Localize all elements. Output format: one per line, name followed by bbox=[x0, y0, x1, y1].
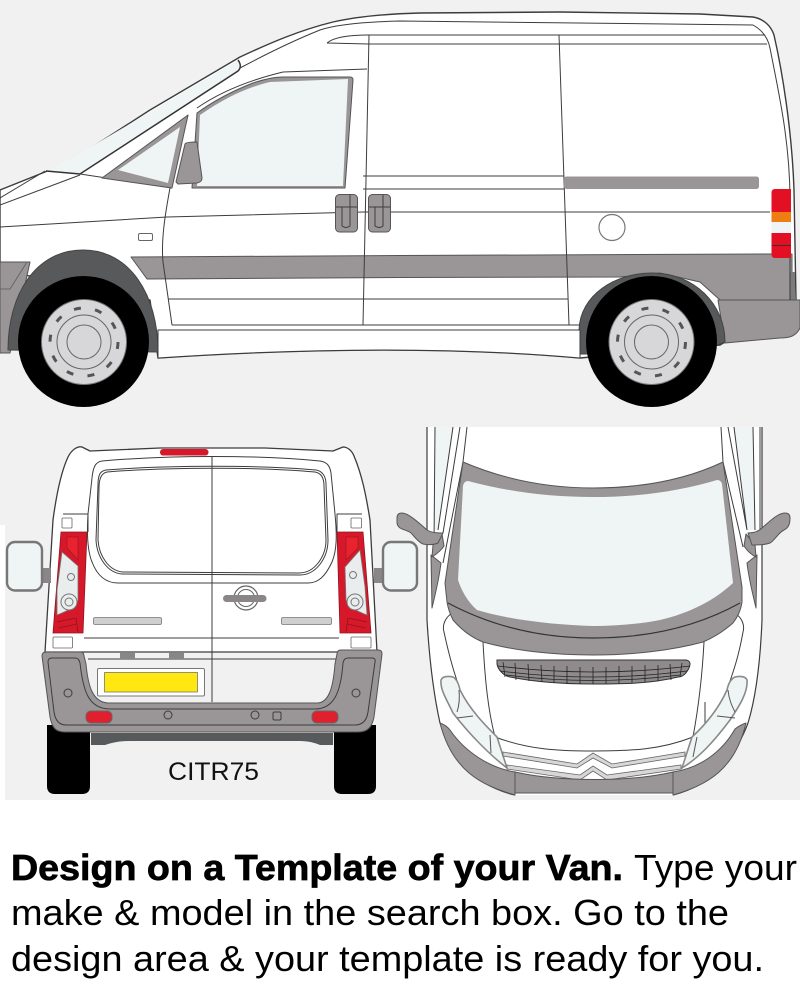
front wheel bbox=[18, 276, 149, 407]
right headlight bbox=[682, 676, 747, 768]
door handle left bbox=[336, 194, 358, 232]
left top mirror bbox=[397, 513, 443, 545]
caption line 1: Design on a Template of your Van. bbox=[11, 847, 623, 888]
model code: CITR75 bbox=[168, 758, 259, 786]
side tail light bbox=[772, 189, 791, 258]
right pillar glass bbox=[734, 427, 755, 530]
door handle bbox=[223, 586, 266, 610]
rear wheel right bbox=[334, 725, 376, 794]
side view of van bbox=[0, 12, 800, 407]
bumper bbox=[42, 650, 382, 732]
hinge right bbox=[169, 653, 184, 659]
van body side bbox=[0, 12, 796, 358]
front bumper centre bbox=[515, 772, 673, 793]
right pillar base bbox=[744, 534, 756, 557]
windscreen side bbox=[45, 60, 240, 174]
bonnet grille bbox=[497, 660, 690, 684]
right tail light bbox=[337, 532, 371, 633]
underbody bbox=[91, 733, 333, 745]
rear bumper bbox=[718, 300, 800, 343]
rear body bbox=[45, 447, 377, 652]
rear mirror arm left bbox=[41, 568, 51, 583]
chevron logo bands bbox=[503, 752, 685, 780]
caption line 1: Type your bbox=[634, 847, 797, 888]
front wheel arch bbox=[8, 250, 158, 352]
caption line 3: design area & your template is ready for you. bbox=[11, 938, 764, 979]
rear mirror right bbox=[383, 542, 417, 590]
brake light bbox=[160, 449, 208, 456]
body panel lines bbox=[0, 21, 790, 325]
fuel cap bbox=[599, 214, 625, 240]
rear wheel bbox=[586, 276, 717, 407]
left tail light bbox=[53, 532, 87, 633]
trim strip left bbox=[94, 618, 162, 624]
reflector right bbox=[312, 711, 338, 723]
front side door window bbox=[192, 77, 353, 188]
right side strip bbox=[747, 555, 757, 608]
right lower front corner bbox=[673, 723, 746, 795]
rear mirror left bbox=[7, 542, 42, 590]
left pillar base bbox=[432, 534, 444, 557]
windscreen glass bbox=[458, 480, 733, 626]
side mirror bbox=[176, 142, 202, 184]
rear mirror arm right bbox=[374, 568, 384, 583]
upper rear stripe bbox=[564, 176, 759, 189]
front bumper side bbox=[0, 262, 30, 353]
sill bbox=[158, 330, 580, 358]
quarter window bbox=[102, 115, 188, 188]
trim strip right bbox=[282, 618, 332, 624]
caption line 2: make & model in the search box. Go to the bbox=[11, 892, 729, 933]
grey lower rear panel and stripe bbox=[131, 254, 792, 300]
caption text bbox=[11, 847, 797, 979]
cab body top view bbox=[427, 427, 762, 795]
rear wheel arch bbox=[579, 273, 725, 354]
pillar lines bbox=[434, 427, 760, 751]
number plate bbox=[98, 668, 204, 696]
hinge left bbox=[120, 653, 135, 659]
windscreen frame bbox=[445, 462, 742, 655]
side marker bbox=[138, 234, 152, 240]
right top mirror bbox=[748, 513, 790, 545]
rear view of van bbox=[7, 447, 417, 794]
rear pillar end strip bbox=[790, 272, 795, 300]
small lamp boxes bbox=[53, 518, 371, 648]
front top view of van bbox=[397, 427, 790, 795]
left headlight bbox=[441, 676, 507, 768]
left side strip bbox=[431, 555, 441, 608]
left lower front corner bbox=[440, 723, 515, 795]
reflector left bbox=[86, 711, 112, 723]
left pillar glass bbox=[434, 427, 453, 530]
rear door outline and window bbox=[63, 456, 362, 702]
rear wheel left bbox=[47, 725, 90, 794]
door handle right bbox=[368, 194, 390, 232]
